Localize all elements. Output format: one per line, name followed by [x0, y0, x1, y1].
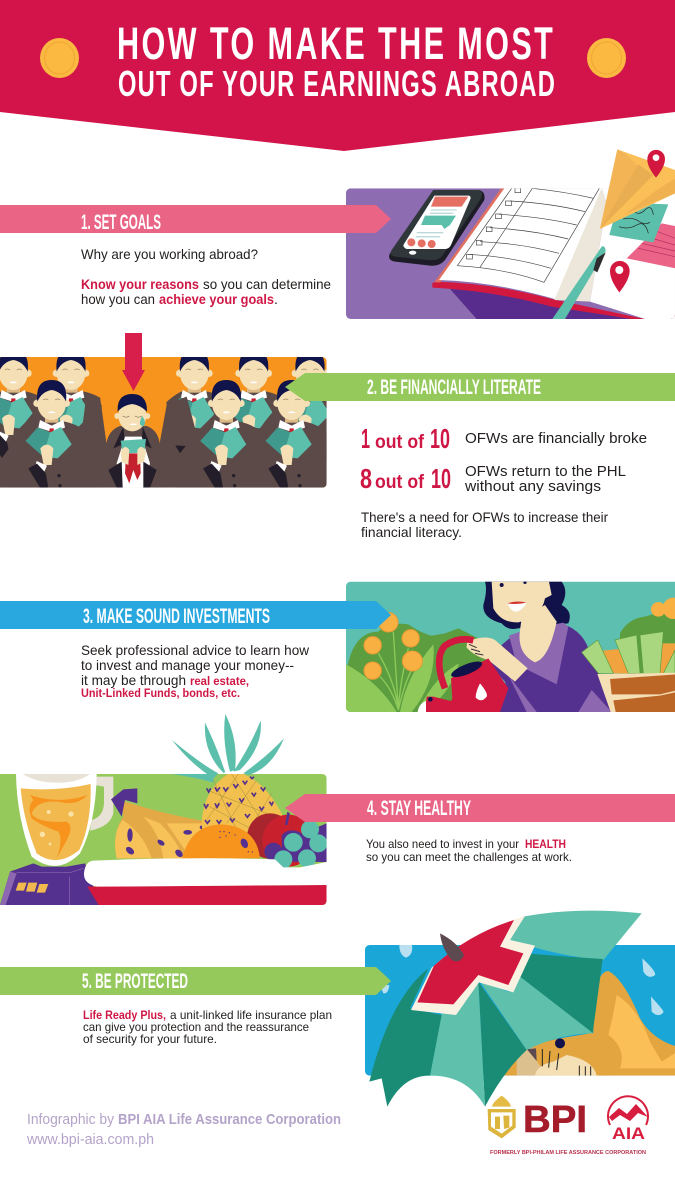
icon: pineapple body: [172, 774, 283, 833]
footer credit: BPI AIA Life Assurance Corporation: [118, 1111, 341, 1128]
icon: apple: [248, 812, 305, 867]
footer credit: Infographic by: [27, 1111, 114, 1128]
banner: 5. be protected: [0, 967, 391, 995]
icon: map pin bottom: [610, 261, 630, 292]
panel: illustration workers with money: [0, 357, 327, 488]
stat: 1 out of 10: 1: [361, 423, 370, 454]
banner: 4. stay healthy: [285, 794, 675, 822]
stat: 8 out of 10: out of: [375, 472, 425, 493]
stat: 1 out of 10: OFWs are financially broke: [465, 430, 647, 447]
title: OUT OF YOUR EARNINGS ABROAD: [118, 64, 555, 104]
stat: 8 out of 10: 8: [360, 463, 372, 494]
icon: crate of money: [582, 598, 675, 712]
text: set goals body: Why are you working abroad?: [81, 246, 258, 262]
text: investments body: Unit-Linked Funds, bonds, etc.: [81, 686, 240, 700]
text: set goals body: .: [274, 291, 278, 307]
logo: BPI wordmark: BPI: [523, 1099, 587, 1141]
banner: 4. stay healthy: 4. STAY HEALTHY: [367, 797, 471, 820]
icon: grapes: [264, 820, 327, 868]
text: be protected body: can give you protection and the reassurance: [83, 1020, 309, 1034]
text: set goals body: so you can determine: [203, 276, 331, 292]
title: HOW TO MAKE THE MOST: [117, 19, 553, 70]
icon: sticky notes: [609, 202, 675, 269]
footer credit: [26, 1111, 341, 1148]
banner: 2. be financially literate: 2. BE FINANCIALLY LITERATE: [367, 376, 541, 399]
lion: [500, 971, 675, 1076]
logo: AIA: [608, 1096, 648, 1143]
text: investments body: it may be through: [81, 672, 186, 688]
banner: 1. set goals: 1. SET GOALS: [81, 211, 161, 234]
text: investments body: to invest and manage your money--: [81, 657, 294, 673]
arrow: red pointing to sad worker: [122, 333, 145, 391]
icon: umbrella: [369, 911, 642, 1107]
text: set goals body: Know your reasons: [81, 276, 199, 292]
logo: BPI crest: [488, 1096, 516, 1138]
stat: 8 out of 10: OFWs return to the PHL: [465, 463, 626, 480]
text: stay healthy body: You also need to invest in your: [366, 837, 519, 851]
text: set goals body: achieve your goals: [159, 291, 274, 307]
stat: 1 out of 10: 10: [430, 423, 450, 454]
icon: map pin top: [647, 150, 665, 178]
panel: illustration healthy food: [0, 714, 327, 905]
text: set goals body: how you can: [81, 291, 155, 307]
icon: paper plane: [600, 149, 675, 229]
text: financial literacy note: financial literacy.: [361, 524, 462, 540]
text: stay healthy body: so you can meet the challenges at work.: [366, 850, 572, 864]
icon: plate: [84, 858, 327, 905]
icon: orange: [182, 824, 260, 858]
text: be protected body: Life Ready Plus,: [83, 1008, 166, 1022]
banner: 2. be financially literate: [285, 373, 675, 401]
header banner: [0, 0, 675, 151]
panel: illustration umbrella and lion: [365, 911, 675, 1107]
banner: 3. make sound investments: 3. MAKE SOUND INVESTMENTS: [83, 605, 270, 628]
text: be protected body: [83, 1008, 332, 1046]
text: be protected body: a unit-linked life insurance plan: [170, 1008, 332, 1022]
text: financial literacy note: [361, 509, 608, 540]
icon: pineapple leaves: [172, 714, 284, 778]
icon: watering can: [418, 639, 508, 712]
icon: right coin: [587, 38, 626, 78]
stat: 1 out of 10: [361, 423, 647, 454]
stat: 8 out of 10: 10: [431, 463, 451, 494]
logo: AIA: AIA: [612, 1124, 645, 1143]
text: investments body: Seek professional advice to learn how: [81, 642, 310, 658]
stat: 1 out of 10: out of: [375, 432, 425, 453]
icon: bananas: [111, 788, 207, 859]
text: stay healthy body: [366, 837, 572, 864]
banner: 5. be protected: 5. BE PROTECTED: [82, 970, 188, 993]
icon: coins on plant: [364, 613, 422, 679]
icon: pen: [552, 246, 606, 319]
text: investments body: real estate,: [190, 674, 249, 688]
panel: illustration notebook: [346, 149, 675, 319]
icon: left coin: [40, 38, 79, 78]
icon: smartphone: [389, 190, 485, 266]
footer credit: www.bpi-aia.com.ph: [26, 1131, 154, 1148]
stat: 8 out of 10: without any savings: [464, 478, 601, 495]
title: [117, 19, 555, 104]
sad worker: [106, 394, 160, 488]
banner: 3. make sound investments: [0, 601, 391, 629]
woman: [467, 581, 612, 712]
text: be protected body: of security for your future.: [83, 1032, 217, 1046]
text: investments body: [81, 642, 310, 700]
panel: illustration woman watering money plants: [346, 581, 675, 712]
banner: 1. set goals: [0, 205, 391, 234]
text: set goals body: [81, 246, 331, 307]
text: financial literacy note: There's a need for OFWs to increase their: [361, 509, 608, 525]
logo caption: FORMERLY BPI-PHILAM LIFE ASSURANCE CORPORATION: [490, 1150, 646, 1156]
icon: blender: [0, 774, 113, 905]
stat: 8 out of 10: [360, 463, 626, 495]
text: stay healthy body: HEALTH: [525, 837, 566, 851]
